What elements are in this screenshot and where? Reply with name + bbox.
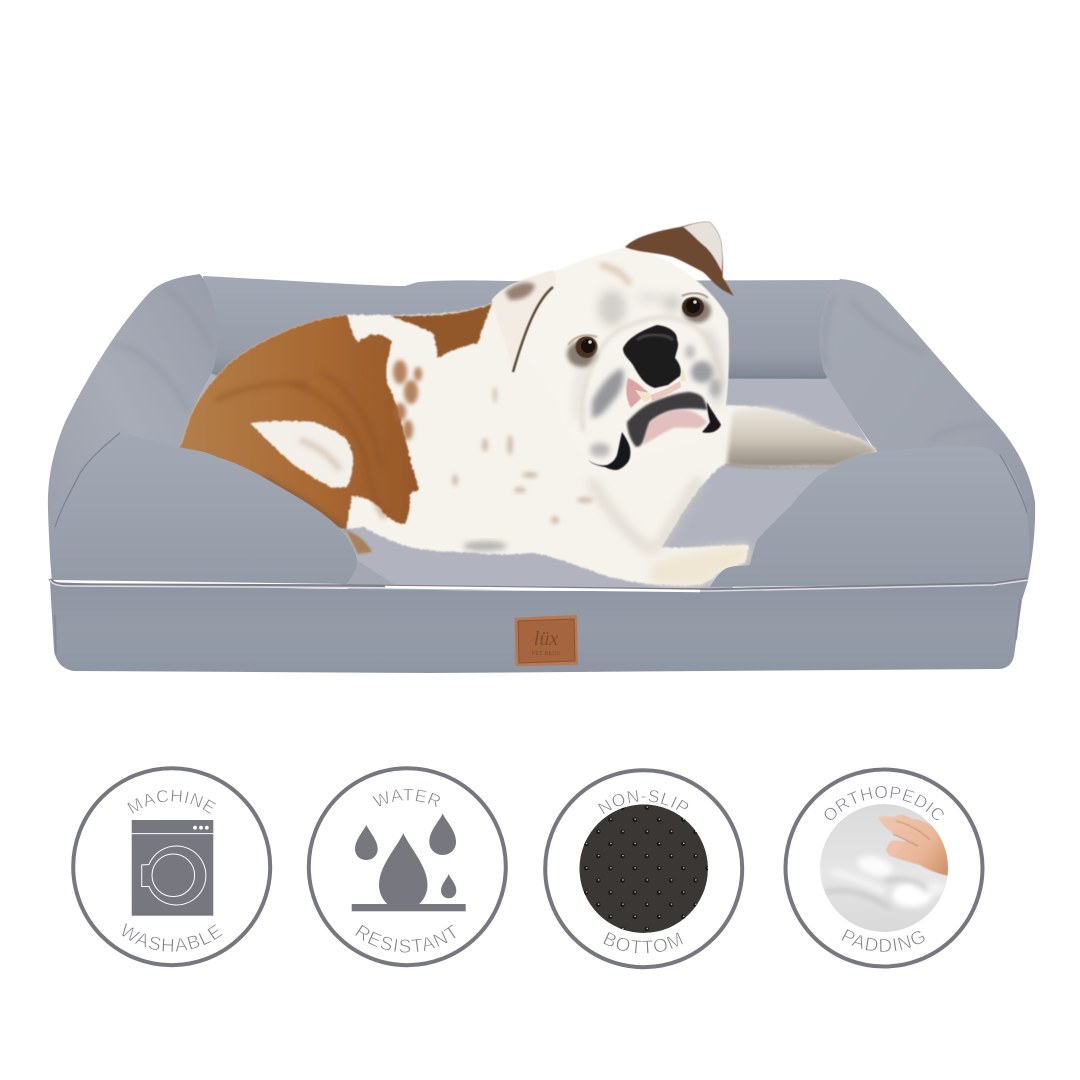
right eye: [682, 293, 711, 323]
dog rear foreleg shading: [727, 407, 878, 467]
nose and upper muzzle: [623, 325, 681, 388]
label: orthopedic: ORTHOPEDIC: [824, 786, 944, 820]
dog bed: [48, 274, 1035, 590]
white hip patch: [250, 421, 353, 488]
brown fold shadows: [215, 372, 385, 518]
body speckles: [452, 387, 593, 524]
badge: water resistant: [306, 766, 508, 968]
base side seams: [55, 600, 1020, 655]
bed seat cushion: [175, 374, 872, 590]
grey mottled jowls: [590, 345, 721, 457]
ring: [545, 770, 742, 967]
right rear arm bolster: [819, 279, 1035, 580]
dotted non-slip texture: [579, 804, 708, 933]
bulldog: [50, 222, 1029, 673]
left ear: [492, 270, 556, 373]
left rear arm bolster: [48, 274, 218, 580]
white piping: [50, 579, 1028, 591]
badge: machine washable: [71, 766, 272, 968]
hand: [878, 815, 949, 876]
shadow under back rest: [215, 374, 826, 378]
ring: [309, 768, 506, 965]
leather badge: lüx: [534, 628, 558, 650]
right ear: [625, 222, 734, 296]
dog paw front cream: [650, 545, 749, 585]
left cushion stitch: [55, 433, 120, 527]
label: water: WATER: [372, 789, 440, 807]
nostril highlights: [637, 335, 673, 340]
seam shadow by hip: [263, 478, 345, 530]
dog body: [176, 303, 878, 586]
ring: [73, 768, 270, 965]
pink chin: [643, 410, 707, 445]
brown speckles: [393, 360, 422, 440]
chest shadow: [590, 478, 700, 552]
muzzle fold: [582, 317, 723, 432]
brown saddle patch: [391, 304, 492, 358]
dark lower lip: [627, 392, 707, 447]
label: resistant: RESISTANT: [355, 924, 456, 952]
dog underside shadow: [463, 541, 507, 551]
gums: [650, 381, 681, 401]
badge: orthopedic padding: [784, 768, 984, 968]
seat front corner flap: [347, 560, 395, 590]
black right jowl: [702, 402, 721, 433]
front left cushion: [50, 432, 357, 584]
label: washable: WASHABLE: [122, 923, 222, 952]
label: machine: MACHINE: [127, 790, 216, 814]
dog head: [492, 247, 729, 467]
black left lip: [588, 432, 630, 470]
leather badge: [514, 615, 578, 666]
right arm folds: [824, 295, 992, 440]
teeth: [635, 367, 686, 402]
left arm folds: [112, 288, 212, 410]
dog back paw: [346, 530, 372, 554]
leather badge: PET BEDS: [532, 651, 560, 657]
badge: non-slip bottom: [543, 768, 744, 970]
brown main coat: [176, 315, 419, 530]
forehead mottling: [577, 290, 719, 420]
bed back rest: [203, 276, 842, 380]
icon: washing machine: [132, 820, 213, 916]
forehead wrinkle: [600, 265, 630, 285]
left eye: [567, 335, 598, 367]
pink mouth: [626, 378, 648, 408]
label: padding: PADDING: [842, 929, 925, 952]
label: bottom: BOTTOM: [604, 932, 683, 954]
label: non-slip: NON-SLIP: [598, 790, 688, 814]
memory foam photo: [820, 804, 949, 932]
ring: [786, 770, 982, 966]
right cushion stitch: [1000, 455, 1027, 513]
hip patch speckle: [300, 440, 340, 470]
icon: water drops: [352, 813, 466, 911]
bed base: [50, 581, 1028, 673]
front right cushion: [710, 446, 1029, 587]
